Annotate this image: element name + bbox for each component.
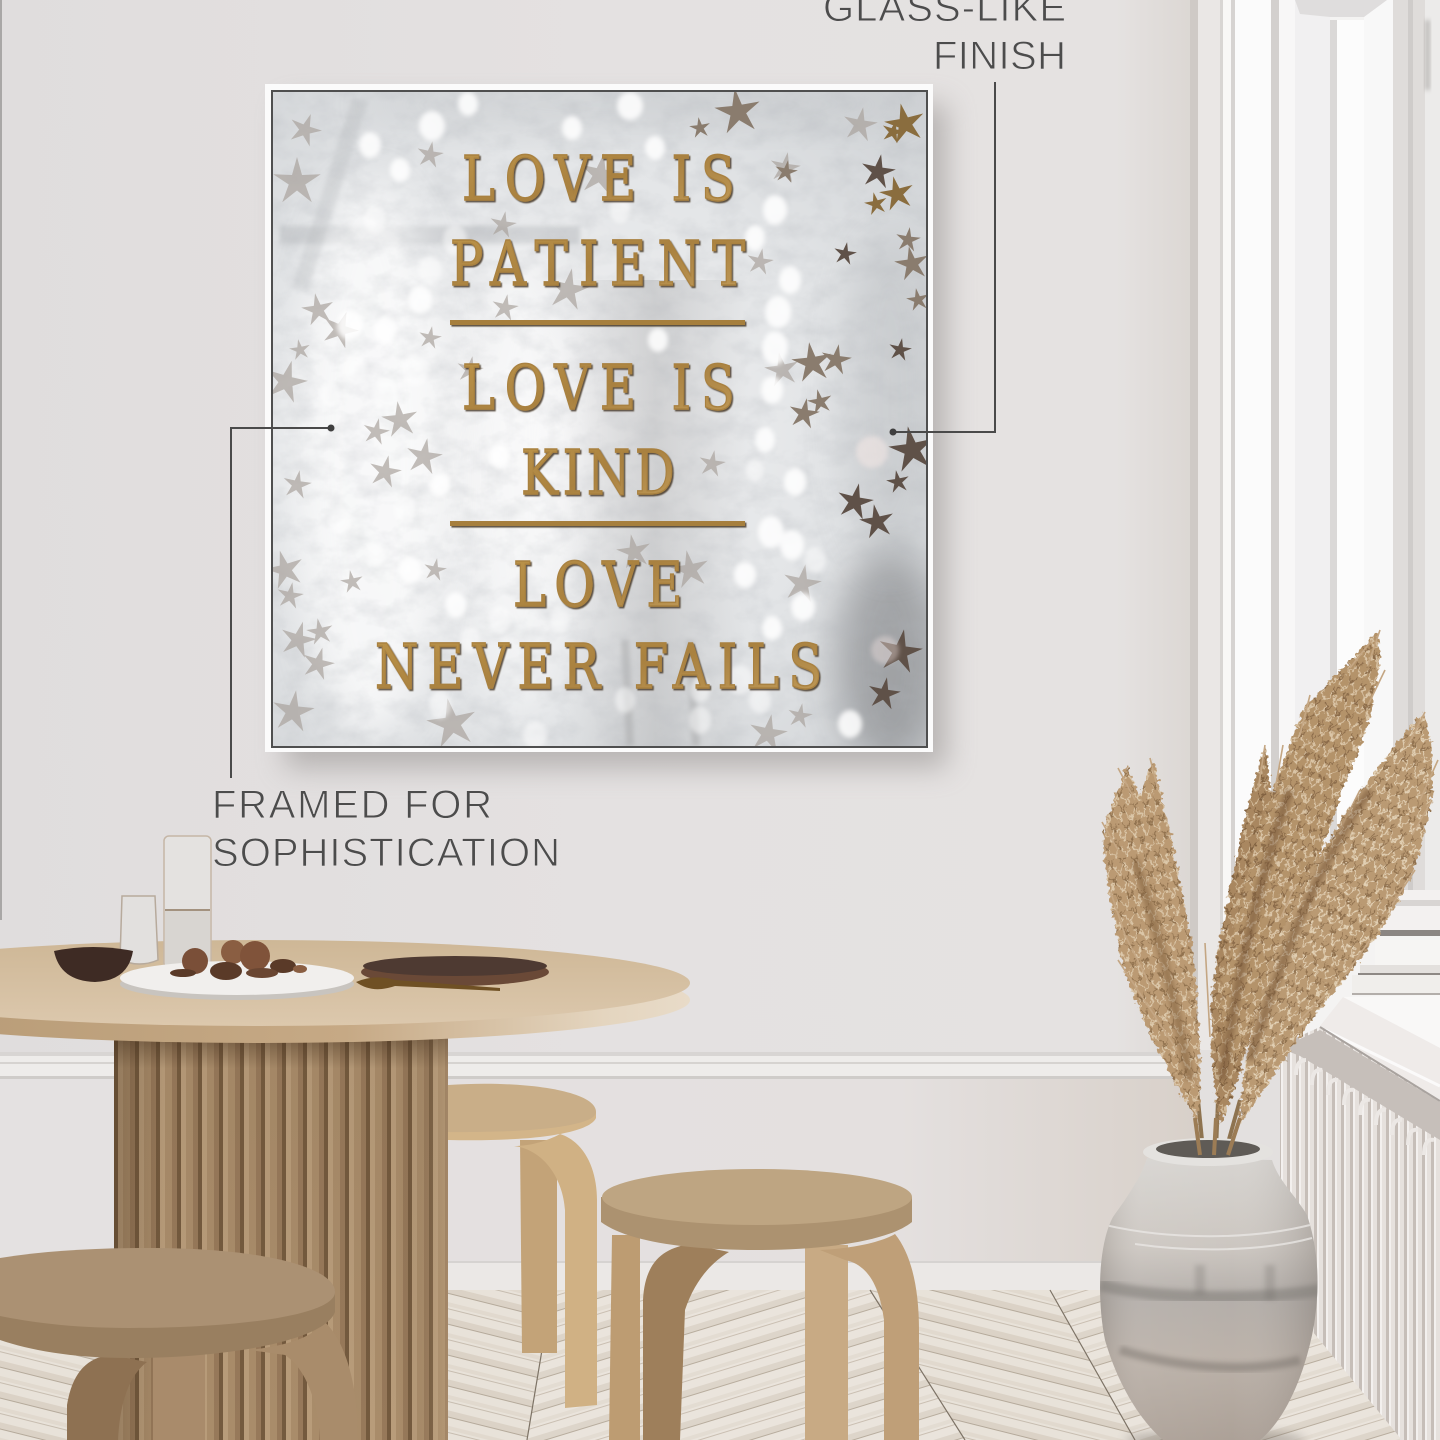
pampas stray feathers — [1102, 630, 1438, 1050]
table setting — [54, 836, 549, 1000]
callout: framed for sophistication: SOPHISTICATION — [212, 831, 560, 875]
bokeh lights — [320, 92, 899, 749]
marble plate — [120, 961, 354, 1000]
drinking glass — [120, 896, 158, 964]
window sill — [1320, 995, 1440, 1101]
spoon — [356, 977, 500, 991]
round table top — [0, 940, 690, 1043]
front right stool — [601, 1169, 919, 1440]
carafe — [164, 836, 211, 968]
canvas background — [273, 80, 945, 770]
wooden plate — [361, 956, 549, 986]
books on window sill — [1352, 930, 1440, 995]
pampas plume left — [1104, 760, 1200, 1125]
canvas inner edge — [272, 91, 927, 747]
front left stool — [0, 1248, 358, 1440]
callout: glass-like finish: FINISH — [933, 34, 1066, 78]
nuts — [170, 940, 307, 980]
ceramic vase — [1095, 1118, 1325, 1440]
artwork quote: love is patient, love is kind, love never fails: NEVER FAILS — [375, 632, 822, 703]
white floater frame — [265, 84, 933, 752]
wall art shadow — [285, 104, 947, 768]
rear stool — [448, 1084, 597, 1408]
scattered stars — [261, 85, 938, 753]
artwork quote: love is patient, love is kind, love never fails: LOVE — [513, 550, 683, 621]
wall moulding rail and baseboard — [0, 1052, 1180, 1290]
callout: framed for sophistication — [212, 424, 560, 875]
pampas shadows — [1135, 790, 1370, 1080]
framed wall art — [261, 80, 945, 770]
dark bowl — [54, 947, 133, 982]
gold divider rules — [450, 320, 745, 526]
artwork quote: love is patient, love is kind, love never fails: KIND — [521, 438, 675, 509]
pampas plume tall — [1220, 633, 1379, 1065]
artwork quote: love is patient, love is kind, love never fails: LOVE IS — [462, 353, 735, 424]
pampas plume center — [1212, 748, 1276, 1125]
pampas plume right — [1240, 713, 1433, 1125]
artwork quote: love is patient, love is kind, love never fails: LOVE IS — [462, 144, 735, 215]
table pedestal — [114, 1036, 448, 1440]
callout: glass-like finish — [823, 0, 1066, 436]
herringbone floor — [0, 1290, 1400, 1440]
radiator — [1280, 1027, 1440, 1440]
callout: framed for sophistication: FRAMED FOR — [212, 783, 492, 827]
artwork quote: love is patient, love is kind, love never fails — [375, 144, 822, 703]
artwork quote: love is patient, love is kind, love never fails: PATIENT — [450, 229, 745, 300]
pampas stems — [1197, 1090, 1240, 1150]
window frame — [1190, 0, 1440, 1050]
